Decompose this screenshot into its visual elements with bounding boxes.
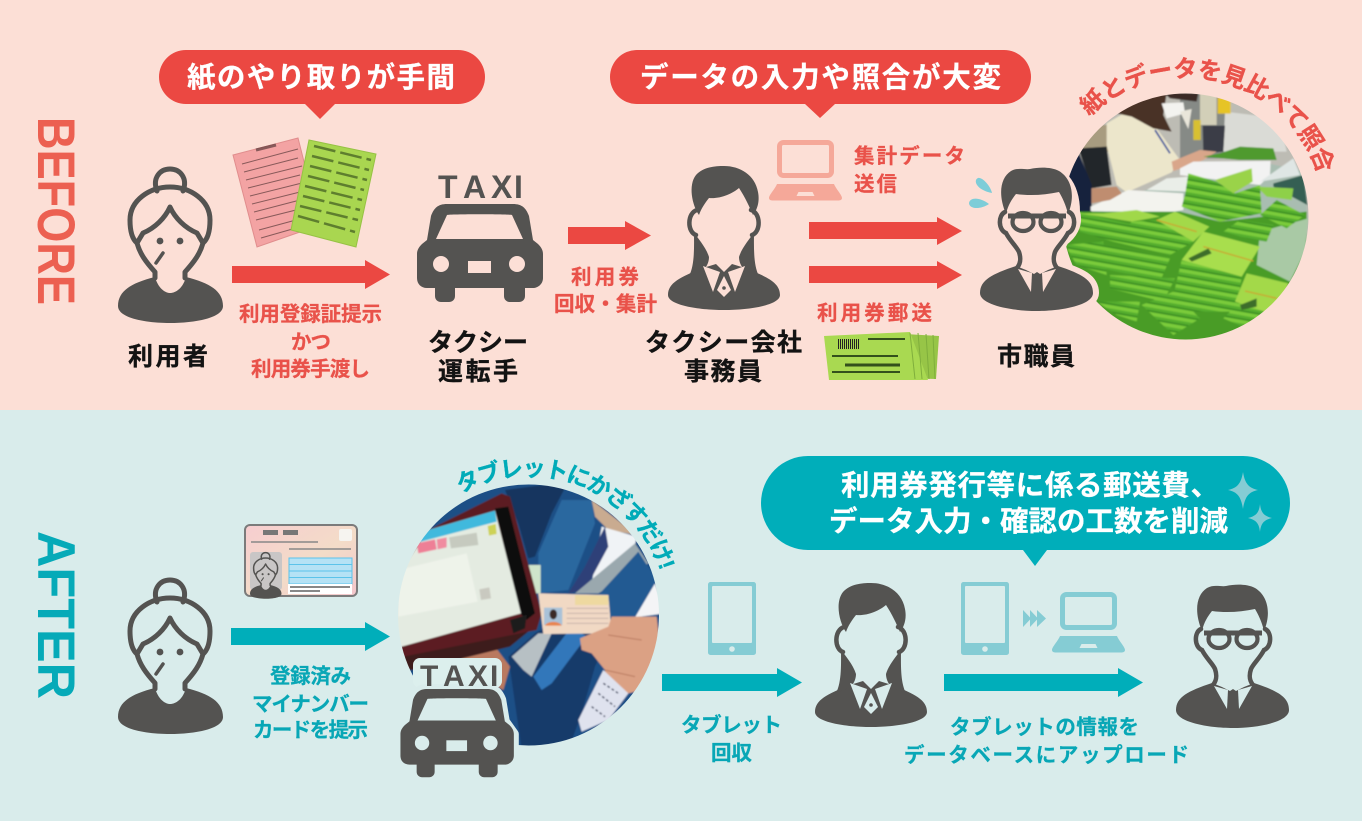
arrow: tablet to office — [662, 668, 802, 697]
photo: card over tablet — [395, 480, 665, 750]
label: upload tablet info: データベースにアップロード — [904, 743, 1189, 767]
label: ticket collection: 利用券 — [571, 266, 639, 289]
label: taxi driver: 運転手 — [438, 358, 518, 386]
label: ticket collection — [554, 266, 658, 316]
speech bubble: reduced costs: 利用券発行等に係る郵送費、 — [841, 470, 1219, 502]
arrow: upload — [944, 668, 1143, 697]
label: taxi company clerk: タクシー会社 — [645, 329, 802, 357]
speech bubble: reduced costs — [761, 456, 1290, 566]
icon: user — [118, 169, 223, 323]
label: present my number card: カードを提示 — [253, 719, 368, 742]
icon: paper forms — [233, 138, 376, 247]
heading: AFTER: AFTER — [26, 531, 85, 699]
arrow: driver to office — [568, 221, 651, 250]
icon: taxi: TAXI — [438, 169, 523, 205]
icon: laptop — [769, 142, 842, 200]
panel: before background — [0, 0, 1362, 410]
label: ticket collection: 回収・集計 — [554, 293, 658, 316]
panel: after background — [0, 410, 1362, 821]
panel: after flow — [26, 456, 1290, 778]
icon: city officer — [1176, 585, 1289, 728]
speech bubble: data entry: データの入力や照合が大変 — [640, 61, 1001, 94]
label: send totals — [854, 144, 965, 196]
label: city officer: 市職員 — [997, 343, 1075, 371]
icon: tablet to laptop — [961, 582, 1125, 655]
icon: city officer — [980, 168, 1093, 311]
icon: taxi on photo: TAXI — [420, 660, 498, 693]
icon: tickets — [824, 332, 939, 380]
label: send totals: 集計データ — [854, 144, 965, 168]
arrow: data to city — [809, 217, 962, 245]
speech bubble: data entry — [610, 50, 1031, 118]
label: send totals: 送信 — [854, 173, 897, 196]
curved callout: just hold over tablet: タブレットにかざすだけ! — [458, 459, 675, 570]
curved callout: compare paper and data: 紙とデータを見比べて照合 — [1079, 56, 1334, 172]
label: taxi company clerk: 事務員 — [684, 358, 762, 386]
arrow: tickets to city — [809, 261, 962, 289]
icon: tablet — [708, 582, 756, 655]
label: upload tablet info — [904, 715, 1189, 767]
icon: taxi on photo — [400, 658, 514, 777]
icon: office staff — [815, 583, 927, 727]
icon: sparkles — [1228, 472, 1272, 532]
photo: staff checking paper tickets — [1066, 94, 1308, 340]
icon: my number card — [245, 525, 357, 599]
icon: user — [118, 580, 223, 734]
arrow: card to driver — [231, 622, 390, 651]
heading: BEFORE: BEFORE — [26, 117, 85, 305]
label: tablet collection: 回収 — [711, 742, 752, 765]
icon: sweat drops — [969, 178, 992, 208]
label: present my number card: 登録済み — [270, 665, 351, 688]
label: show registration and hand over ticket: 利用登録証提示 — [239, 303, 382, 326]
arrow: user to driver — [232, 260, 390, 289]
speech bubble: reduced costs: データ入力・確認の工数を削減 — [829, 505, 1228, 538]
icon: office staff — [668, 166, 780, 310]
label: tablet collection — [681, 713, 782, 765]
label: ticket mailing: 利用券郵送 — [817, 302, 932, 325]
speech bubble: paper handling: 紙のやり取りが手間 — [187, 61, 455, 94]
panel: before flow — [26, 50, 1334, 386]
label: taxi driver — [428, 329, 528, 386]
icon: taxi — [417, 169, 543, 302]
label: show registration and hand over ticket: かつ — [291, 331, 331, 354]
label: taxi company clerk — [645, 329, 802, 386]
label: user: 利用者 — [128, 343, 208, 371]
label: present my number card — [252, 665, 369, 742]
speech bubble: paper handling — [159, 50, 485, 119]
label: taxi driver: タクシー — [428, 329, 528, 357]
label: show registration and hand over ticket — [239, 303, 382, 381]
label: upload tablet info: タブレットの情報を — [950, 715, 1139, 739]
label: show registration and hand over ticket: 利用券手渡し — [251, 358, 370, 381]
label: present my number card: マイナンバー — [252, 693, 369, 716]
label: tablet collection: タブレット — [681, 713, 782, 737]
